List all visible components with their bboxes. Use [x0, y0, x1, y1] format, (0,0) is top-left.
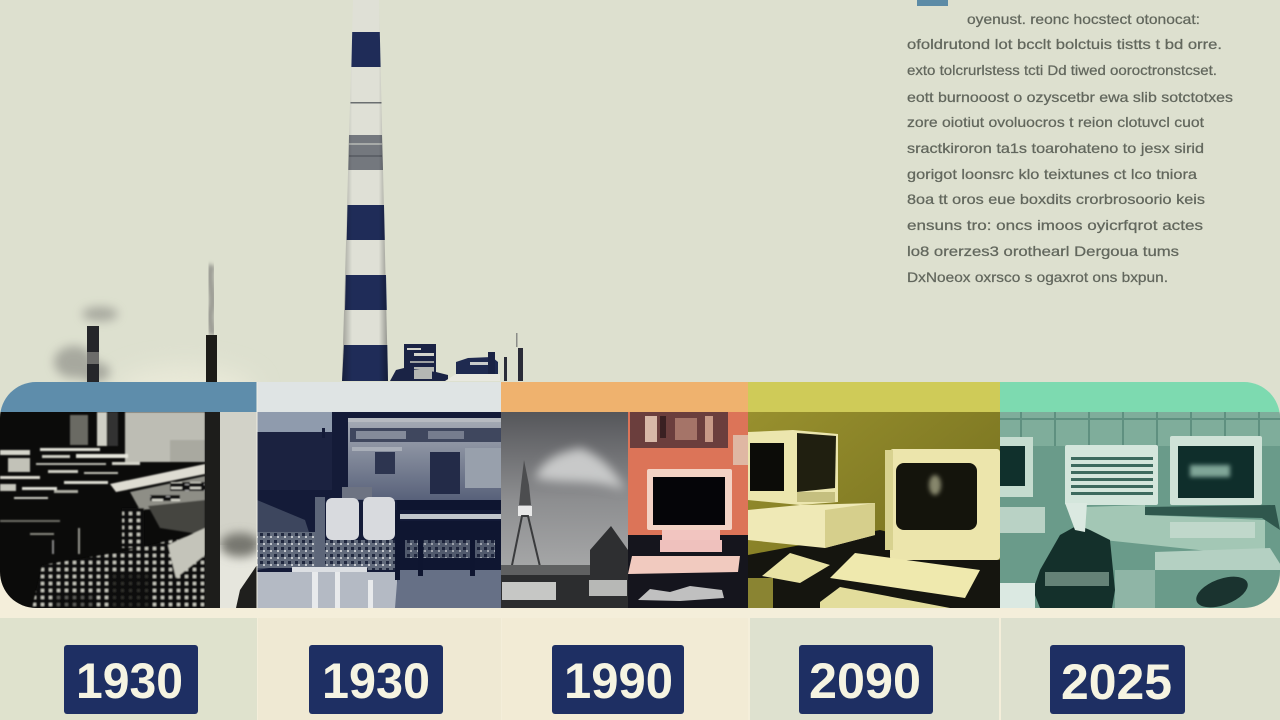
year badge 1930: [64, 645, 198, 714]
timeline band: [0, 382, 1280, 613]
colour tab 1: blue: [0, 382, 257, 412]
bottom cream background: [0, 560, 1280, 720]
body text block: zore oiotiut ovoluocros t reion clotuvcl cuot: [907, 114, 1204, 130]
year badge 2090: 2090: [809, 653, 921, 709]
body text block: ensuns tro: oncs imoos oyicrfqrot actes: [907, 217, 1203, 233]
desk surface: [1085, 505, 1265, 550]
body text block: lo8 orerzes3 orothearl Dergoua tums: [907, 243, 1179, 259]
body text block: DxNoeox oxrsco s ogaxrot ons bxpun.: [907, 269, 1168, 285]
mouse: [638, 586, 724, 601]
left monitor: [1000, 437, 1033, 497]
computer mouse: [1196, 576, 1248, 608]
small chimney with smoke, left: [54, 307, 118, 382]
photo panel 5: teal computer office: [1000, 412, 1280, 613]
pink keyboard: [628, 556, 740, 574]
dotted crowd area lower down: [32, 532, 205, 608]
column panel 5: [1001, 618, 1280, 720]
colour tab 5: mint: [1000, 382, 1280, 412]
body text block: 8oa tt oros eue boxdits crorbrosoorio keis: [907, 191, 1205, 207]
tall thin chimney with smoke plume: [206, 265, 217, 382]
person silhouette: [1033, 503, 1115, 608]
body text block: sractkiroron ta1s toarohateno to jesx sirid: [907, 140, 1204, 156]
colour tab 2: pale grey: [257, 382, 501, 412]
body text block: gorigot loonsrc klo teixtunes ct lco tniora: [907, 166, 1197, 182]
column panel 4: [750, 618, 999, 720]
colour tab 3: orange: [501, 382, 748, 412]
year badge 2025: [1050, 645, 1185, 714]
body text block: ofoldrutond lot bcclt bolctuis tistts t bd orre.: [907, 36, 1222, 52]
left computer: [748, 430, 875, 548]
column panel 1: [0, 618, 257, 720]
column panel 3: [502, 618, 748, 720]
year badge 1930: 1930: [76, 653, 183, 709]
body text block: [907, 11, 1233, 285]
dividing hairlines between panels: [256, 382, 258, 608]
year badge 1930 second: [309, 645, 443, 714]
right computer: [885, 449, 1000, 560]
tower: [511, 460, 541, 565]
year badge 1990: 1990: [564, 653, 673, 709]
body text block: eott burnooost o ozyscetbr ewa slib sotctotxes: [907, 89, 1233, 105]
column panel 2: [258, 618, 501, 720]
white tanks: [326, 498, 359, 540]
keyboards: [830, 553, 980, 598]
year badge 1990: [552, 645, 684, 714]
photo panel 3: tower and pink computer: [501, 412, 748, 608]
factory silhouette: [390, 333, 523, 381]
white streaks of the upper works: [0, 450, 30, 455]
year badge 2090: [799, 645, 933, 714]
striped vent unit: [1065, 445, 1158, 505]
photo panel 1: black and white factory: [0, 412, 260, 608]
photo panel 2: blue-toned building: [257, 412, 501, 608]
wall pictures: [630, 412, 748, 465]
body text block: exto tolcrurlstess tcti Dd tiwed ooroctronstcset.: [907, 62, 1217, 78]
photo panel 4: cream computers on olive: [748, 412, 1000, 608]
year badge 2025: 2025: [1061, 654, 1172, 710]
year badge 1930 second: 1930: [322, 653, 430, 709]
main striped smokestack: [342, 0, 388, 381]
icon: blue square marker: [917, 0, 948, 6]
right monitor: [1170, 436, 1262, 505]
body text block: oyenust. reonc hocstect otonocat:: [967, 11, 1200, 27]
soft glow behind the factories: [115, 366, 255, 418]
colour tab 4: yellow-green: [748, 382, 1000, 412]
pink monitor: [647, 469, 732, 552]
